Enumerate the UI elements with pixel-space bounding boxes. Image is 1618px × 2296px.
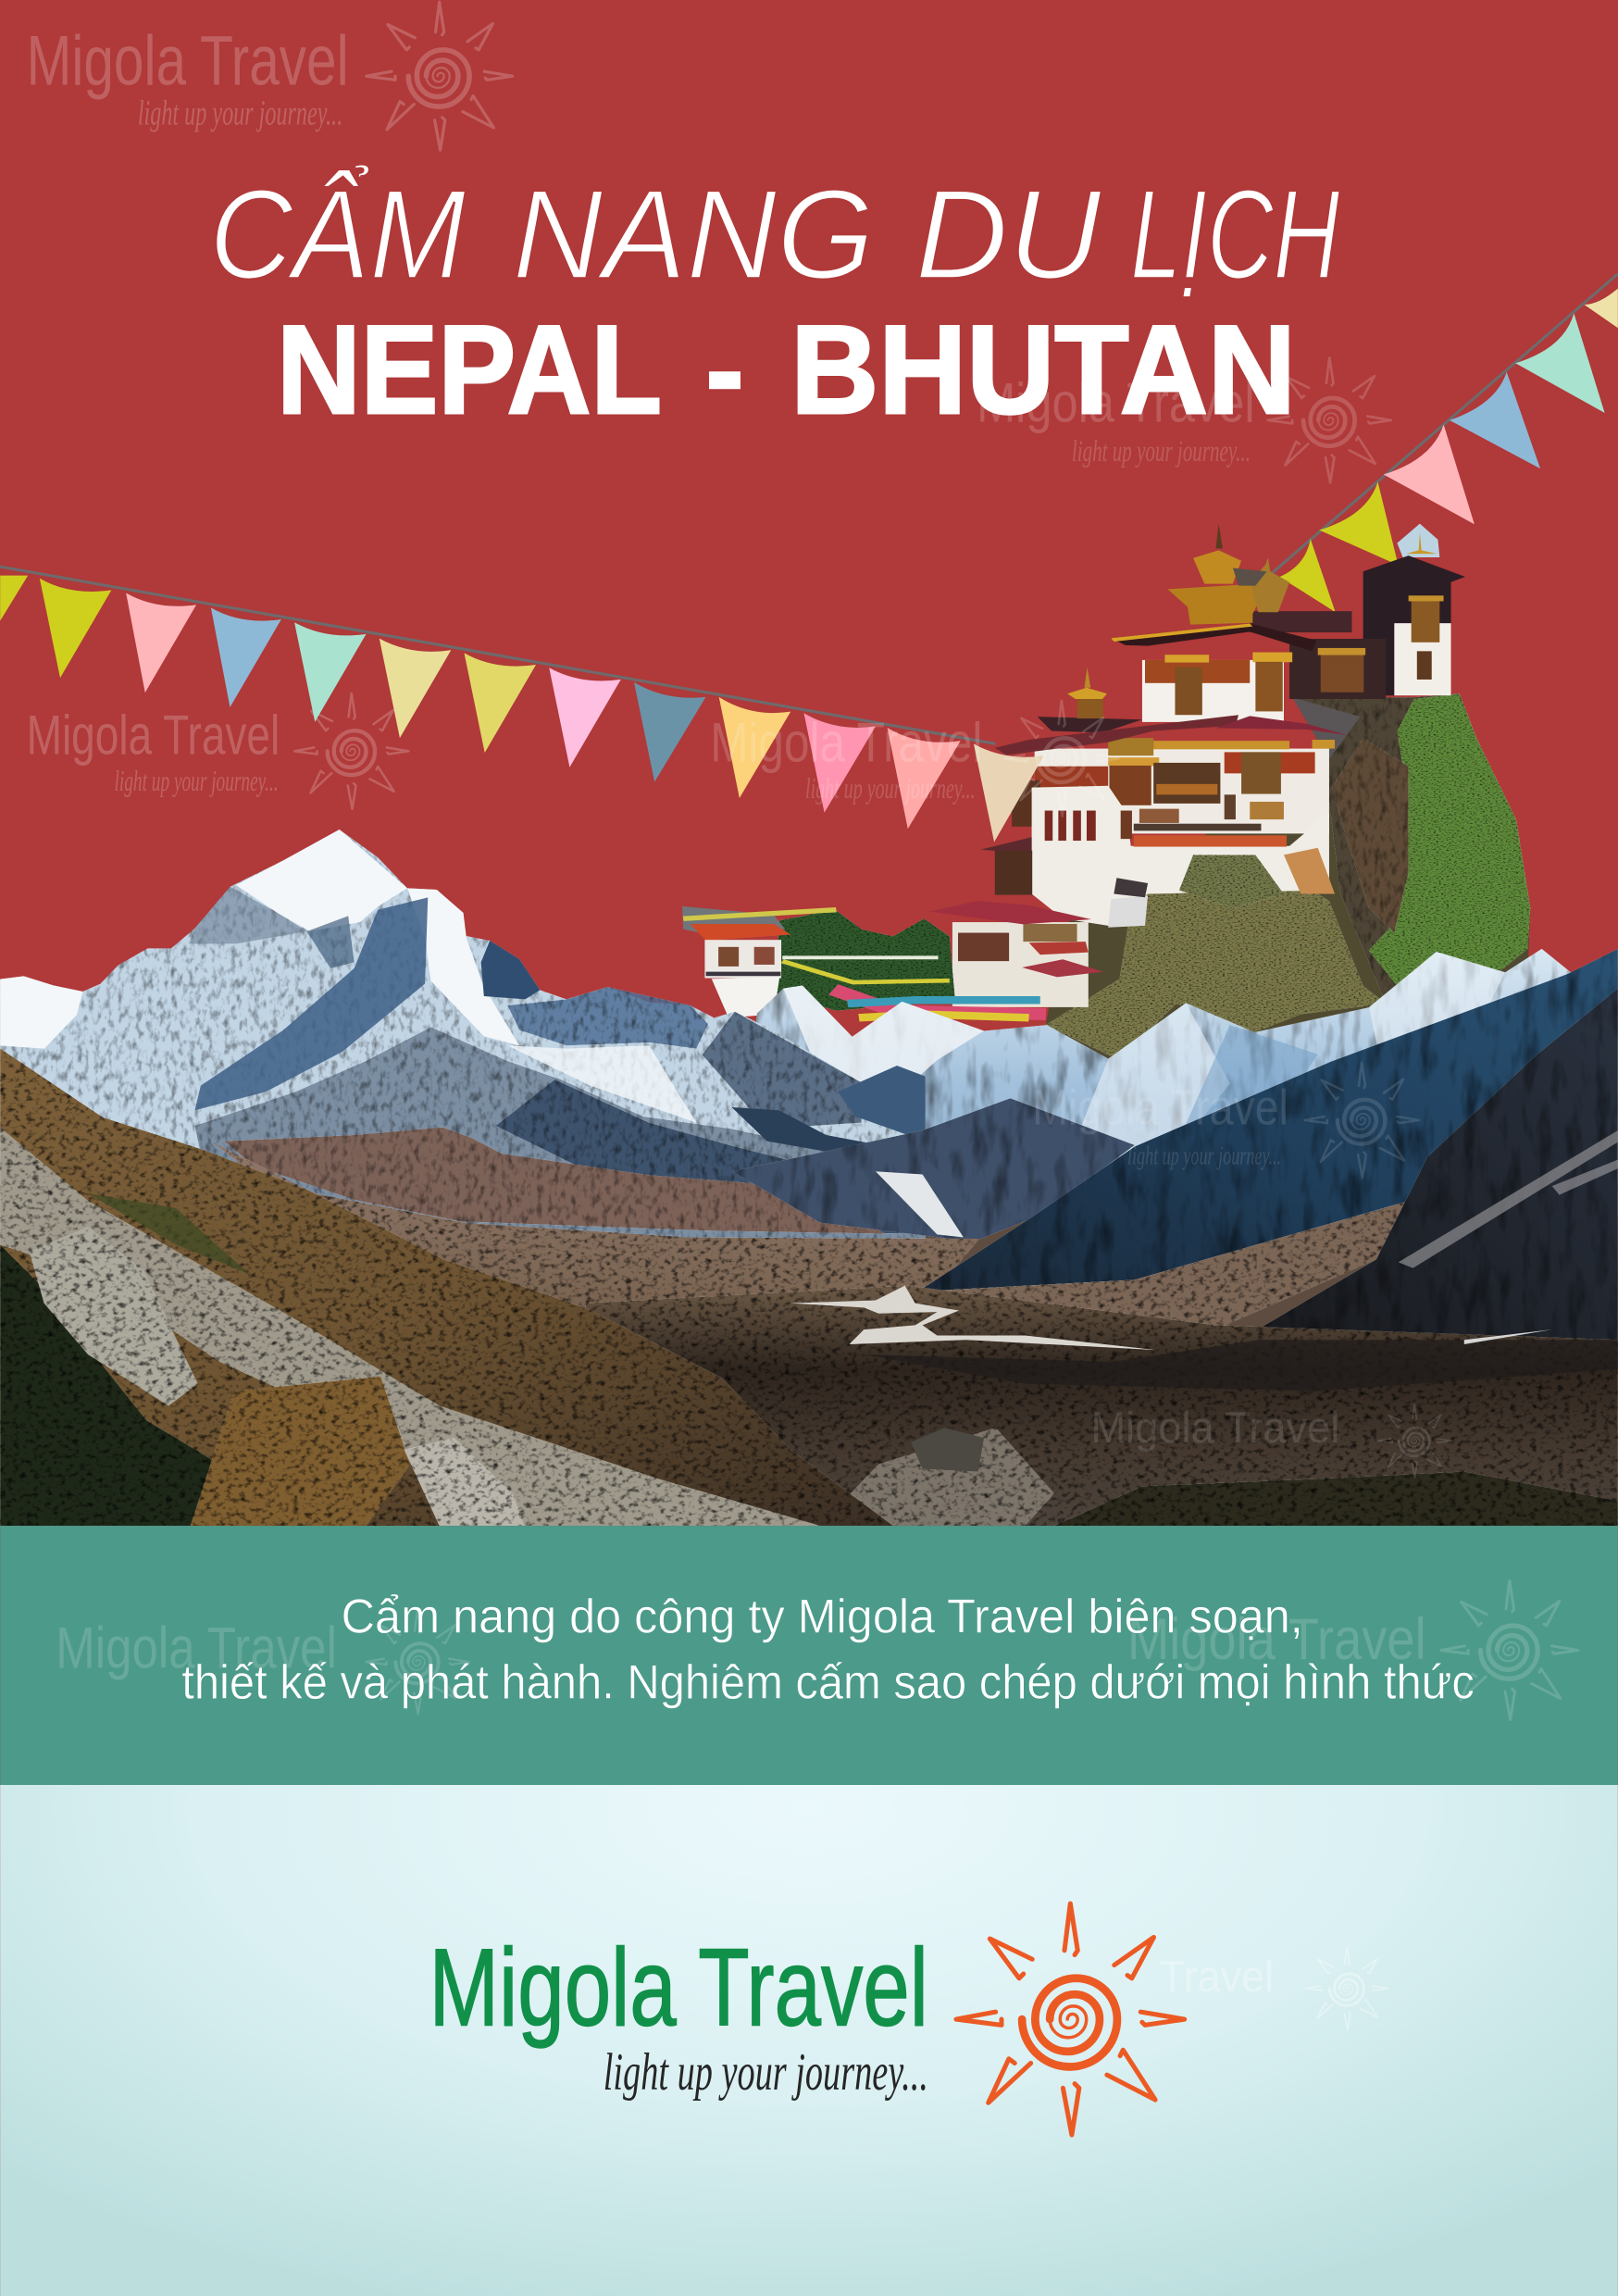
right tower xyxy=(1363,532,1465,695)
watermark: middle left: light up your journey... xyxy=(115,765,279,797)
cliff backing xyxy=(1046,695,1530,1060)
watermark: on valley floor: Migola Travel xyxy=(1090,1404,1339,1453)
watermark: behind heading xyxy=(977,357,1391,482)
watermark: band right: Migola Travel xyxy=(1127,1607,1426,1672)
watermark: top left xyxy=(27,2,513,150)
title: line one: CẨM xyxy=(209,164,466,306)
pale spire behind tower xyxy=(1397,524,1439,557)
watermark: behind heading: light up your journey... xyxy=(1072,434,1251,468)
watermark: on dark mountain: Migola Travel xyxy=(1032,1080,1288,1136)
watermark: band left: Migola Travel xyxy=(56,1616,337,1680)
glacial moraine xyxy=(212,1142,979,1317)
copyright notice: Cẩm nang do công ty Migola Travel biên soạn, xyxy=(342,1591,1303,1644)
title: line one: DU xyxy=(915,164,1102,306)
temple on the cliff xyxy=(682,524,1530,1060)
left rocky slope xyxy=(0,1048,893,1526)
far snowy range xyxy=(732,949,1618,1216)
brown foothill xyxy=(224,1128,885,1234)
watermark: footer xyxy=(1160,1947,1388,2030)
dark blue mountain on the right xyxy=(918,949,1618,1292)
logo xyxy=(429,1903,1185,2135)
landscape base xyxy=(0,1216,1618,1526)
cliff and trees xyxy=(1292,693,1530,1004)
title: line one xyxy=(209,164,1340,306)
far blue-brown valley wall xyxy=(732,1098,1135,1242)
blue shadow pyramid xyxy=(496,1079,920,1234)
title: line one: LỊCH xyxy=(1130,164,1340,306)
icon: sun xyxy=(956,1903,1185,2135)
logo wordmark: Migola Travel xyxy=(429,1927,928,2049)
green band xyxy=(0,1526,1618,1785)
watermark: middle left xyxy=(27,693,408,809)
logo tagline: light up your journey... xyxy=(604,2043,928,2102)
watermark: on valley floor xyxy=(1090,1404,1450,1478)
dark pyramid peak xyxy=(703,1012,862,1129)
middle hall xyxy=(995,715,1348,833)
pale footer background xyxy=(0,1785,1618,2296)
small spired tower xyxy=(1038,668,1142,732)
watermark: behind heading: Migola Travel xyxy=(977,372,1255,434)
watermark: middle right, over flags xyxy=(710,701,1119,817)
watermark: band right xyxy=(1127,1581,1578,1719)
scrub hill xyxy=(1046,855,1386,1060)
copyright notice xyxy=(181,1591,1475,1710)
bunting: right string of flags xyxy=(1271,274,1618,612)
watermark: top left: Migola Travel xyxy=(27,22,349,101)
upper halls xyxy=(1111,524,1386,722)
watermark: middle left: Migola Travel xyxy=(27,705,280,767)
lower house xyxy=(904,901,1103,1007)
main snow peak xyxy=(0,830,926,1246)
title: line two: BHUTAN xyxy=(790,299,1296,440)
main white wall xyxy=(1032,786,1335,928)
grey lower ridge xyxy=(194,1027,926,1240)
trees by the village xyxy=(774,910,955,1011)
rock shadows xyxy=(189,887,708,1110)
left house xyxy=(682,906,790,1017)
title: line one: NANG xyxy=(513,164,874,306)
scrub bushes over wall xyxy=(1179,855,1284,908)
watermark: band left xyxy=(56,1610,468,1714)
snow faces xyxy=(0,830,696,1123)
dark ridge on the right xyxy=(1215,989,1618,1354)
watermark: on dark mountain xyxy=(1032,1062,1419,1178)
red background xyxy=(0,0,1618,1530)
watermark: top left: light up your journey... xyxy=(138,94,342,132)
brown slope on the right xyxy=(864,1199,1414,1329)
bunting: left string of flags xyxy=(0,567,1044,842)
title: line two xyxy=(277,299,1296,440)
prayer flags xyxy=(683,910,1046,1017)
title: line two: NEPAL xyxy=(277,299,662,440)
watermark: on dark mountain: light up your journey... xyxy=(1127,1142,1281,1170)
watermark: middle right, over flags: Migola Travel xyxy=(710,711,982,773)
copyright notice: thiết kế và phát hành. Nghiêm cấm sao chép dưới mọi hình thức xyxy=(181,1656,1475,1710)
valley floor xyxy=(586,1286,1618,1526)
watermark: footer: Travel xyxy=(1160,1953,1274,2002)
title: line two: - xyxy=(705,299,744,440)
watermark: middle right, over flags: light up your journey... xyxy=(805,772,976,805)
low dark tower xyxy=(981,837,1032,895)
